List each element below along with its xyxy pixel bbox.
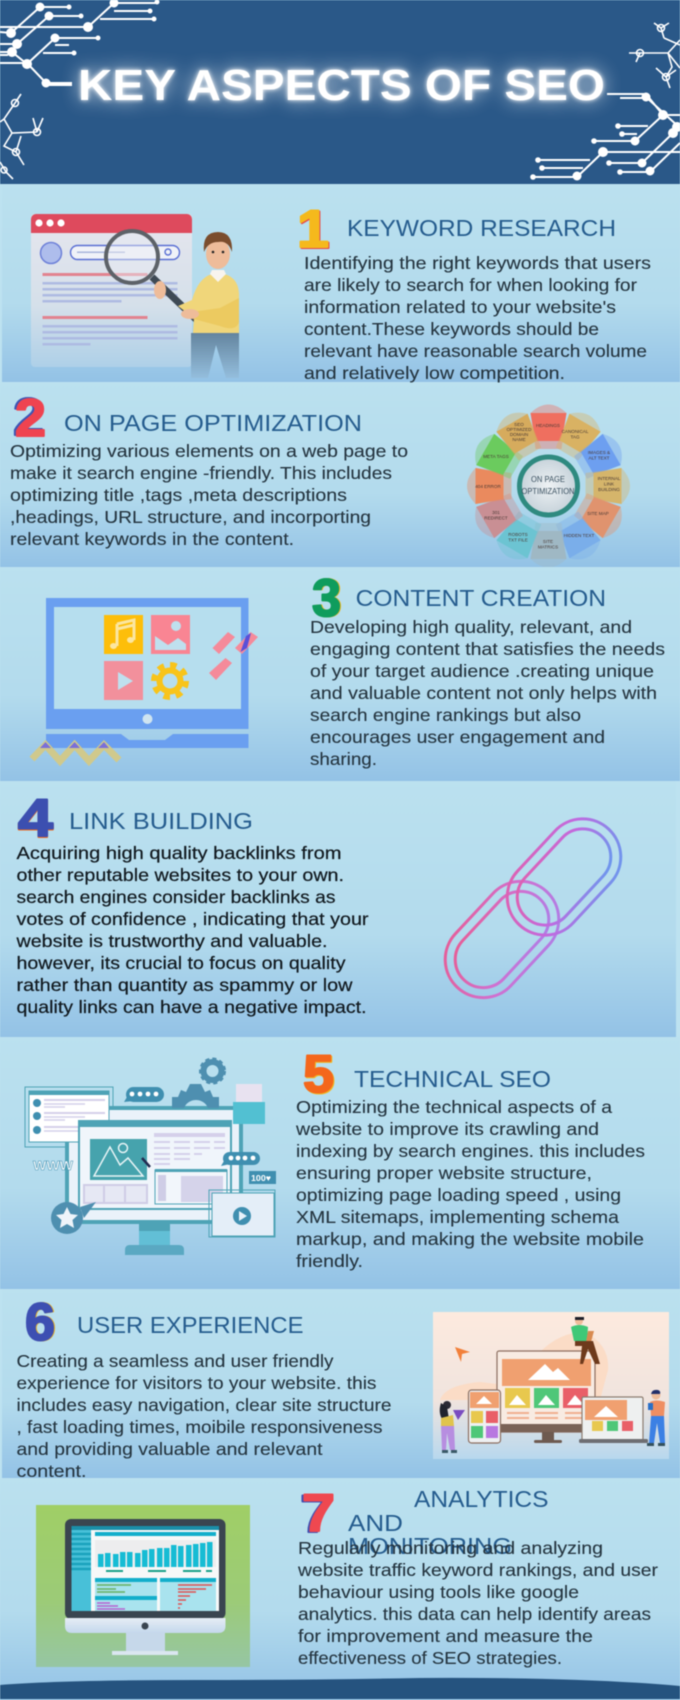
description bbox=[16, 1351, 392, 1481]
description: and relatively low competition. bbox=[304, 363, 565, 383]
description: Creating a seamless and user friendly bbox=[16, 1351, 334, 1371]
heading: LINK BUILDING bbox=[69, 808, 253, 834]
chart: on page wheel: HIDDEN TEXT bbox=[564, 533, 594, 538]
description: optimizing page loading speed , using bbox=[296, 1185, 621, 1205]
description: engaging content that satisfies the needs bbox=[310, 639, 665, 659]
bar chart bbox=[98, 1542, 212, 1567]
description: behaviour using tools like google bbox=[298, 1582, 579, 1602]
description: however, its crucial to focus on quality bbox=[16, 953, 346, 973]
description bbox=[310, 617, 665, 769]
description bbox=[297, 1538, 658, 1668]
icon: gear bbox=[154, 665, 186, 697]
phone bbox=[468, 1390, 500, 1443]
star badge bbox=[51, 1202, 96, 1234]
description: and providing valuable and relevant bbox=[16, 1439, 323, 1459]
chart: on page wheel: ROBOTS bbox=[508, 532, 528, 537]
heading bbox=[348, 1486, 548, 1559]
description: of your target audience .creating unique bbox=[310, 661, 654, 681]
chart: on page wheel: TAG bbox=[570, 434, 580, 440]
icon: play bbox=[104, 661, 143, 700]
description: website to improve its crawling and bbox=[295, 1119, 599, 1139]
circuit: bottom right bbox=[531, 94, 680, 180]
chart: on page wheel: HEADINGS bbox=[536, 423, 560, 428]
description: information related to your website's bbox=[304, 297, 616, 317]
heading: MONITORING bbox=[348, 1533, 512, 1559]
circuit: top left bbox=[0, 0, 158, 86]
description: relevant keywords in the content. bbox=[10, 529, 294, 549]
description: analytics. this data can help identify areas bbox=[298, 1604, 651, 1624]
gears bbox=[172, 1084, 219, 1108]
icon: chain link bbox=[430, 803, 636, 1013]
description: other reputable websites to your own. bbox=[16, 865, 344, 885]
description: indexing by search engines. this includes bbox=[296, 1141, 645, 1161]
number 7: 7 bbox=[302, 1484, 335, 1543]
likes tag bbox=[249, 1171, 276, 1184]
chart: on page wheel: ALT TEXT bbox=[589, 456, 610, 460]
description: , fast loading times, moibile responsiveness bbox=[16, 1417, 383, 1437]
person sitting bbox=[571, 1317, 600, 1364]
number 5: 5 bbox=[303, 1045, 334, 1104]
description: content.These keywords should be bbox=[304, 319, 599, 339]
left window bbox=[29, 1091, 109, 1142]
chart: on page wheel: DOMAIN bbox=[510, 432, 528, 437]
number 4: 4 bbox=[18, 789, 54, 848]
big monitor bbox=[497, 1351, 595, 1443]
description: search engines consider backlinks as bbox=[16, 887, 336, 907]
description: Identifying the right keywords that users bbox=[304, 253, 651, 273]
panel: user experience bbox=[2, 1289, 680, 1481]
chart: on page wheel: ON PAGE bbox=[531, 474, 565, 484]
description: quality links can have a negative impact. bbox=[16, 997, 366, 1017]
number 2: 2 bbox=[15, 389, 46, 448]
chart: on page wheel: MATRICS bbox=[538, 544, 558, 550]
chart: on page wheel: NAME bbox=[512, 437, 526, 442]
illustration: analytics monitor bbox=[36, 1505, 250, 1667]
description: votes of confidence , indicating that your bbox=[16, 909, 369, 929]
circuit: left molecule bbox=[0, 94, 43, 179]
description: Acquiring high quality backlinks from bbox=[16, 843, 342, 863]
chart: on page wheel: SITE MAP bbox=[587, 511, 609, 516]
description: Regularly monitoring and analyzing bbox=[298, 1538, 603, 1558]
heading: ANALYTICS bbox=[414, 1486, 548, 1512]
chart: on page wheel: LINK bbox=[604, 482, 615, 486]
description: relevant have reasonable search volume bbox=[304, 341, 647, 361]
chart: on page wheel: META TAGS bbox=[483, 454, 509, 459]
chart: on page wheel: OPTIMIZED bbox=[506, 427, 532, 432]
panel: link building bbox=[0, 781, 676, 1037]
video window bbox=[209, 1190, 275, 1237]
description: XML sitemaps, implementing schema bbox=[296, 1207, 619, 1227]
laptop bbox=[579, 1397, 648, 1443]
chart: on page wheel bbox=[467, 404, 630, 568]
description: includes easy navigation, clear site structure bbox=[16, 1395, 392, 1415]
number 3: 3 bbox=[312, 569, 341, 628]
main window bbox=[78, 1120, 232, 1209]
illustration: search results with magnifier bbox=[31, 214, 239, 378]
number 1: 1 bbox=[297, 200, 329, 259]
circuit: right molecule bbox=[629, 23, 680, 88]
description: friendly. bbox=[296, 1251, 363, 1271]
description: Optimizing the technical aspects of a bbox=[296, 1097, 612, 1117]
description: effectiveness of SEO strategies. bbox=[298, 1648, 562, 1668]
description bbox=[295, 1097, 645, 1271]
chart: on page wheel: INTERNAL bbox=[598, 476, 620, 481]
heading: USER EXPERIENCE bbox=[77, 1312, 304, 1338]
chart: on page wheel: TXT FILE bbox=[508, 538, 528, 542]
chart: on page wheel: CANONICAL bbox=[562, 429, 588, 434]
heading: TECHNICAL SEO bbox=[354, 1066, 551, 1092]
panel: on page optimization bbox=[0, 383, 680, 568]
footer wave bbox=[0, 1678, 680, 1699]
description bbox=[304, 253, 651, 383]
speech bubbles bbox=[124, 1087, 260, 1166]
illustration: monitor with media icons bbox=[32, 598, 258, 761]
panel: technical seo bbox=[0, 1037, 680, 1289]
description: ,headings, URL structure, and incorporting bbox=[10, 507, 371, 527]
icon: picture bbox=[151, 615, 190, 654]
man bbox=[647, 1390, 665, 1446]
heading: KEYWORD RESEARCH bbox=[347, 215, 616, 241]
description: optimizing title ,tags ,meta descriptions bbox=[10, 485, 347, 505]
heading: ON PAGE OPTIMIZATION bbox=[64, 410, 362, 436]
description: Developing high quality, relevant, and bbox=[310, 617, 632, 637]
chart: on page wheel: BUILDING bbox=[598, 487, 620, 492]
description: search engine rankings but also bbox=[310, 705, 581, 725]
description: website traffic keyword rankings, and user bbox=[297, 1560, 658, 1580]
header banner bbox=[0, 0, 680, 184]
description: website is trustworthy and valuable. bbox=[15, 931, 328, 951]
description: experience for visitors to your website. this bbox=[16, 1373, 377, 1393]
description: sharing. bbox=[310, 749, 377, 769]
description: make it search engine -friendly. This includes bbox=[10, 463, 392, 483]
chart: on page wheel: 404 ERROR bbox=[475, 484, 501, 489]
description: are likely to search for when looking for bbox=[304, 275, 637, 295]
description bbox=[10, 441, 408, 549]
chart: on page wheel: OPTIMIZATION bbox=[522, 486, 574, 496]
woman bbox=[440, 1401, 465, 1453]
description: markup, and making the website mobile bbox=[296, 1229, 644, 1249]
illustration: technical dashboard monitor bbox=[25, 1059, 276, 1255]
heading: CONTENT CREATION bbox=[356, 585, 606, 611]
panel: analytics and monitoring bbox=[0, 1478, 680, 1700]
number 6: 6 bbox=[25, 1293, 55, 1352]
likes tag: 100♥ bbox=[251, 1173, 271, 1183]
description: and valuable content not only helps with bbox=[310, 683, 657, 703]
decorative stripes bbox=[209, 632, 258, 680]
chart: on page wheel: REDIRECT bbox=[484, 516, 508, 520]
description: encourages user engagement and bbox=[310, 727, 605, 747]
panel: keyword research bbox=[2, 185, 680, 383]
description: for improvement and measure the bbox=[298, 1626, 593, 1646]
www tag: WWW bbox=[33, 1158, 74, 1173]
folder bbox=[236, 1084, 262, 1106]
chart: on page wheel: 301 bbox=[492, 510, 500, 515]
heading: AND bbox=[348, 1510, 403, 1536]
description bbox=[15, 843, 369, 1017]
description: rather than quantity as spammy or low bbox=[16, 975, 353, 995]
chart: on page wheel: SEO bbox=[514, 422, 524, 427]
description: Optimizing various elements on a web page to bbox=[10, 441, 408, 461]
description: ensuring proper website structure, bbox=[296, 1163, 592, 1183]
title: KEY ASPECTS OF SEO bbox=[78, 61, 605, 110]
icon: music bbox=[104, 615, 143, 654]
panel: content creation bbox=[0, 567, 680, 781]
illustration: responsive devices bbox=[433, 1312, 669, 1459]
chart: on page wheel: IMAGES & bbox=[588, 450, 610, 455]
zigzag bbox=[32, 745, 119, 761]
chart: on page wheel: SITE bbox=[543, 539, 553, 544]
description: content. bbox=[16, 1461, 86, 1481]
